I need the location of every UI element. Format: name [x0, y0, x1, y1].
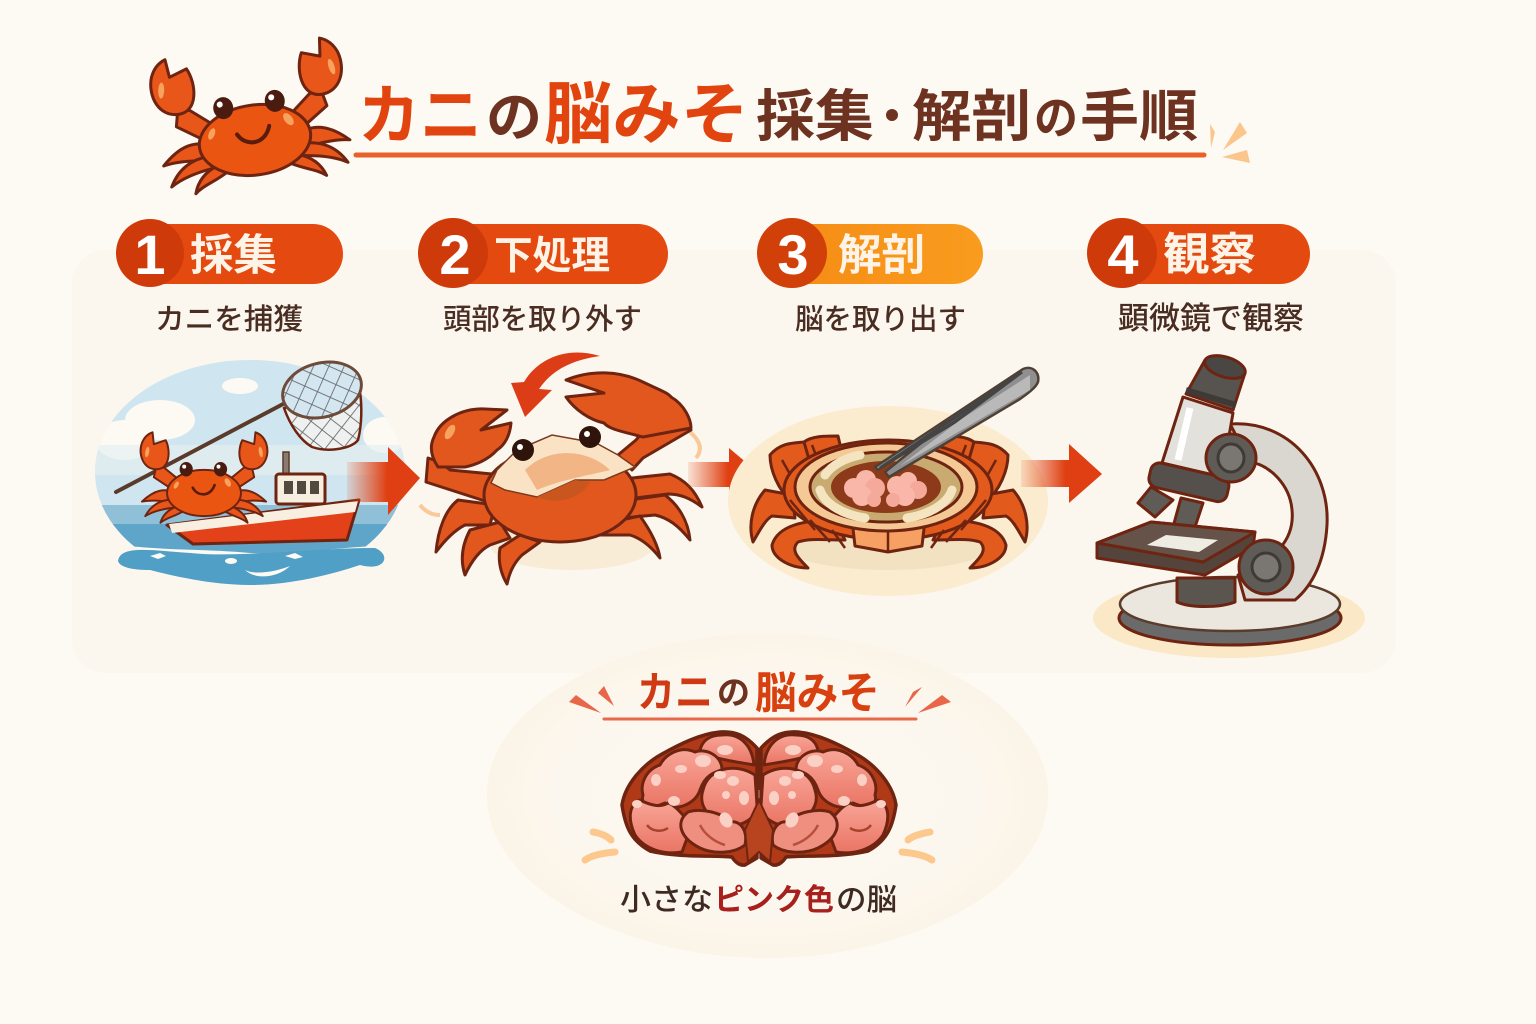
callout caption [620, 884, 897, 917]
step 1 caption: カニを捕獲 [155, 303, 303, 336]
icon: title crab [147, 36, 356, 198]
brain [844, 470, 927, 507]
step 2 badge: 2 [439, 223, 471, 286]
panel: steps background [72, 250, 1396, 673]
step 2 badge [418, 218, 668, 288]
brain sparkle marks [585, 832, 932, 860]
title underline [356, 152, 1204, 158]
title: の [1034, 92, 1078, 144]
callout caption: 小さな [620, 884, 713, 917]
legs [436, 474, 702, 584]
title: 解剖 [912, 85, 1031, 148]
arrow: step 3 to 4 [1021, 444, 1102, 503]
illustration: microscope [1093, 351, 1365, 658]
title: 脳みそ [544, 77, 749, 153]
title: 手順 [1080, 85, 1198, 148]
arrow: step 2 to 3 [688, 448, 761, 502]
arrow: step 1 to 2 [347, 447, 420, 515]
callout heading: の [717, 674, 750, 711]
step 3 caption: 脳を取り出す [795, 303, 966, 336]
step 4 badge: 4 [1107, 223, 1139, 286]
step 3 badge [757, 218, 983, 288]
net [116, 354, 367, 492]
illustration: crab on fishing boat with net [90, 354, 410, 595]
callout sparkle marks [569, 686, 951, 713]
illustration: crab brain [622, 732, 896, 865]
step 4 caption: 顕微鏡で観察 [1118, 301, 1304, 336]
callout heading: 脳みそ [755, 669, 880, 718]
legs [751, 436, 846, 568]
step 4 badge: 観察 [1163, 229, 1256, 280]
crab on boat [141, 432, 267, 523]
illustration: crab with shell removed [420, 373, 702, 584]
arrow: head removal curved [511, 352, 600, 417]
title: カニ [358, 79, 482, 152]
step 4 badge [1087, 218, 1310, 288]
title sparkle marks [1210, 122, 1250, 163]
illustration: opened crab with tweezers [728, 368, 1048, 596]
title [358, 77, 1198, 153]
tweezers [875, 368, 1038, 477]
step 1 badge: 採集 [190, 232, 277, 280]
step 3 badge: 3 [777, 223, 809, 286]
callout caption: ピンク色 [714, 884, 834, 917]
callout underline [604, 718, 916, 720]
step 1 badge: 1 [134, 223, 166, 286]
callout caption: の脳 [836, 884, 897, 917]
callout heading: カニ [637, 669, 713, 716]
left claw [426, 409, 511, 502]
title: の [486, 88, 542, 148]
title: 採集 [756, 85, 874, 148]
shell [795, 443, 977, 531]
step 2 caption: 頭部を取り外す [443, 303, 642, 336]
step 1 badge [116, 219, 343, 287]
panel: crab brain callout background [487, 633, 1048, 958]
body [484, 448, 636, 542]
right claw [566, 373, 691, 470]
callout heading [637, 669, 880, 718]
step 2 badge: 下処理 [494, 235, 610, 278]
step 3 badge: 解剖 [838, 232, 925, 280]
boat [167, 452, 359, 544]
